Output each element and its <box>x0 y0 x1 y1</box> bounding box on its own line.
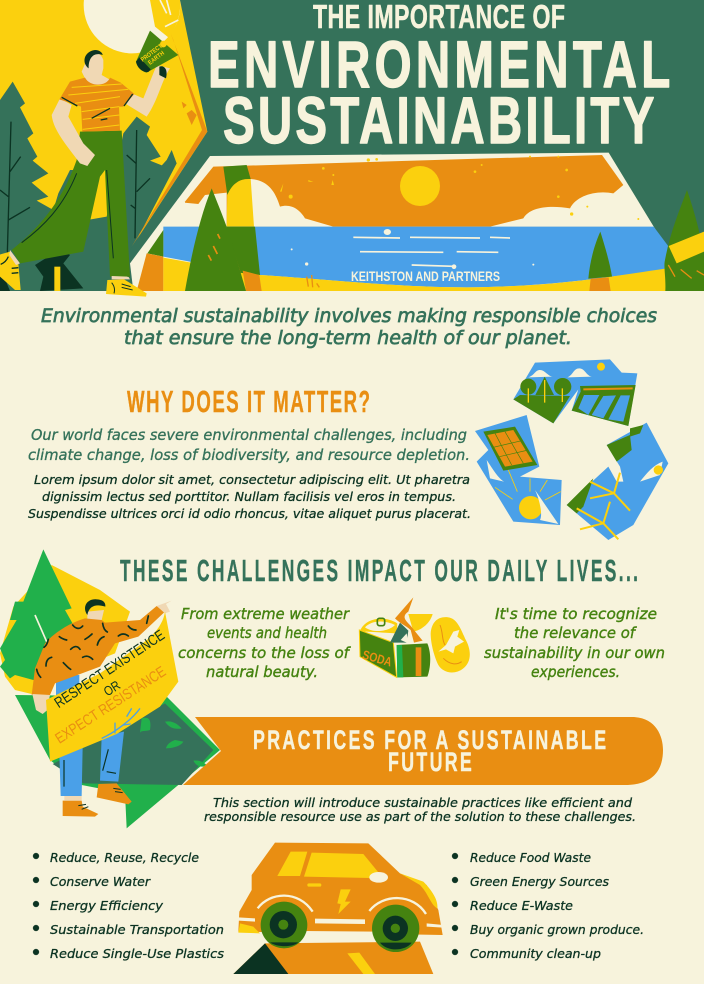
list: right practices: Buy organic grown produce. <box>470 922 644 937</box>
text block: section introduction <box>204 795 636 824</box>
intro statement: that ensure the long-term health of our planet. <box>124 327 572 349</box>
list: right practices: Reduce E-Waste <box>470 898 573 913</box>
text block: extreme weather: natural beauty. <box>206 663 318 681</box>
illustration: electric car on road <box>233 843 443 974</box>
list: right practices: Green Energy Sources <box>470 874 609 889</box>
illustration: man with megaphone: PROTECT <box>140 43 164 64</box>
banner heading line two: FUTURE <box>388 746 472 777</box>
list: right practices: Reduce Food Waste <box>470 850 591 865</box>
title line: sustainability: SUSTAINABILITY <box>223 84 654 158</box>
text block: time to recognize: It's time to recognize <box>495 605 657 623</box>
text block: extreme weather: From extreme weather <box>181 605 351 623</box>
text block: section introduction: This section will introduce sustainable practices like efficient and <box>213 795 632 810</box>
list: right practices <box>452 850 644 961</box>
illustration: man with megaphone <box>0 31 178 297</box>
text block: lorem ipsum <box>28 472 471 521</box>
banner heading line one: PRACTICES FOR A SUSTAINABLE <box>253 724 606 755</box>
illustration: protester with banner: RESPECT EXISTENCE <box>51 627 168 712</box>
illustration: protester with banner: OR <box>101 678 123 699</box>
text block: time to recognize: sustainability in our own <box>484 644 665 662</box>
text block: extreme weather: concerns to the loss of <box>178 644 351 662</box>
top arrow: trees and solar farm <box>513 359 637 426</box>
illustration: man with megaphone: EARTH <box>147 50 166 67</box>
text block: time to recognize: the relevance of <box>514 624 637 642</box>
right arrow: wind turbines <box>567 423 668 540</box>
title line: the importance of: THE IMPORTANCE OF <box>313 0 565 36</box>
text block: extreme weather <box>178 605 351 681</box>
title <box>208 0 670 158</box>
illustration: protester with banner <box>0 549 220 828</box>
text block: challenges summary <box>28 426 470 464</box>
list: left practices: Reduce Single-Use Plastics <box>50 946 224 961</box>
header banner <box>0 0 704 297</box>
left arrow: solar panel and sun <box>475 415 562 525</box>
illustration: protester with banner: EXPECT RESISTANCE <box>52 663 169 747</box>
list: left practices: Energy Efficiency <box>50 898 164 913</box>
text block: time to recognize: experiences. <box>531 663 620 681</box>
icon: soda can and broken egg <box>359 597 470 677</box>
illustration: yellow sky and forest <box>0 0 704 291</box>
intro statement: Environmental sustainability involves making responsible choices <box>41 305 657 327</box>
icon: recycling symbol with renewable energy scenes <box>475 359 668 540</box>
company name: KEITHSTON AND PARTNERS <box>351 269 500 284</box>
text block: time to recognize <box>484 605 665 681</box>
title line: environmental: ENVIRONMENTAL <box>208 28 670 102</box>
landscape scene <box>130 153 704 291</box>
list: left practices: Reduce, Reuse, Recycle <box>50 850 199 865</box>
text block: challenges summary: Our world faces severe environmental challenges, including <box>31 426 467 444</box>
heading: why does it matter: WHY DOES IT MATTER? <box>127 385 370 419</box>
icon: soda can and broken egg: SODA <box>361 648 394 669</box>
text block: lorem ipsum: Lorem ipsum dolor sit amet, consectetur adipiscing elit. Ut pharetra <box>34 472 470 487</box>
text block: extreme weather: events and health <box>207 624 327 642</box>
text block: challenges summary: climate change, loss of biodiversity, and resource depletion. <box>28 446 470 464</box>
intro statement <box>41 305 657 349</box>
text block: lorem ipsum: dignissim lectus sed porttitor. Nullam facilisis vel eros in tempus. <box>42 489 456 504</box>
list: right practices: Community clean-up <box>470 946 601 961</box>
list: left practices: Conserve Water <box>50 874 151 889</box>
text block: lorem ipsum: Suspendisse ultrices orci id odio rhoncus, vitae aliquet purus placerat. <box>28 506 471 521</box>
list: left practices <box>33 850 224 961</box>
heading: these challenges: THESE CHALLENGES IMPACT OUR DAILY LIVES... <box>120 554 638 588</box>
list: left practices: Sustainable Transportation <box>50 922 224 937</box>
banner: practices for a sustainable future <box>183 717 663 785</box>
text block: section introduction: responsible resource use as part of the solution to these challenges. <box>204 809 636 824</box>
